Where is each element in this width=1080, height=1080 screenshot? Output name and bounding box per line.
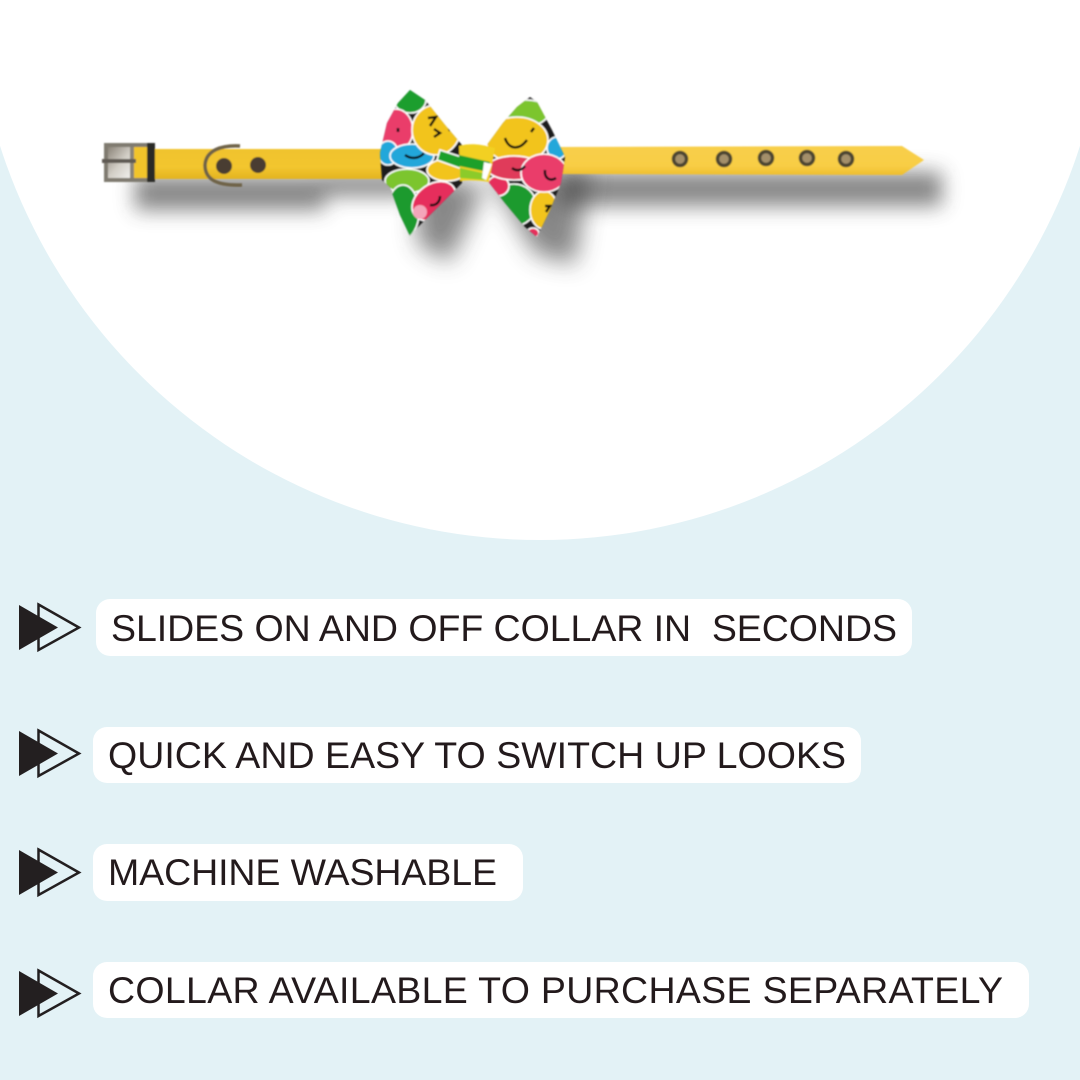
label pill — [93, 844, 523, 901]
label pill — [93, 727, 861, 783]
face marks — [398, 117, 450, 205]
eyelets — [674, 152, 852, 166]
icon: double arrow — [19, 730, 79, 776]
icon: double arrow — [19, 970, 79, 1016]
label pill — [93, 962, 1029, 1018]
right wing — [486, 96, 566, 238]
left wing — [378, 89, 463, 236]
collar strap left — [155, 149, 385, 179]
icon: double arrow — [19, 850, 79, 895]
rivets — [216, 158, 232, 174]
label text: MACHINE WASHABLE — [108, 851, 497, 893]
label text: COLLAR AVAILABLE TO PURCHASE SEPARATELY — [108, 969, 1003, 1011]
label text: SLIDES ON AND OFF COLLAR IN SECONDS — [111, 607, 897, 649]
feature 2 — [19, 727, 861, 783]
collar strap right with pointed tip — [560, 146, 924, 175]
face marks — [505, 128, 556, 212]
feature 1 — [19, 599, 912, 656]
feature 3 — [19, 844, 523, 901]
buckle — [102, 143, 155, 182]
feature 4 — [19, 962, 1029, 1018]
label pill — [96, 599, 912, 656]
white circle backdrop — [0, 0, 1080, 540]
icon: double arrow — [19, 604, 79, 650]
bow tie — [375, 85, 570, 240]
product photo: yellow collar with bow tie — [102, 85, 942, 264]
bow shadow — [415, 170, 590, 264]
bow knot — [459, 144, 495, 182]
collar shadow — [135, 172, 942, 210]
keeper loop — [205, 146, 242, 185]
label text: QUICK AND EASY TO SWITCH UP LOOKS — [108, 734, 846, 776]
